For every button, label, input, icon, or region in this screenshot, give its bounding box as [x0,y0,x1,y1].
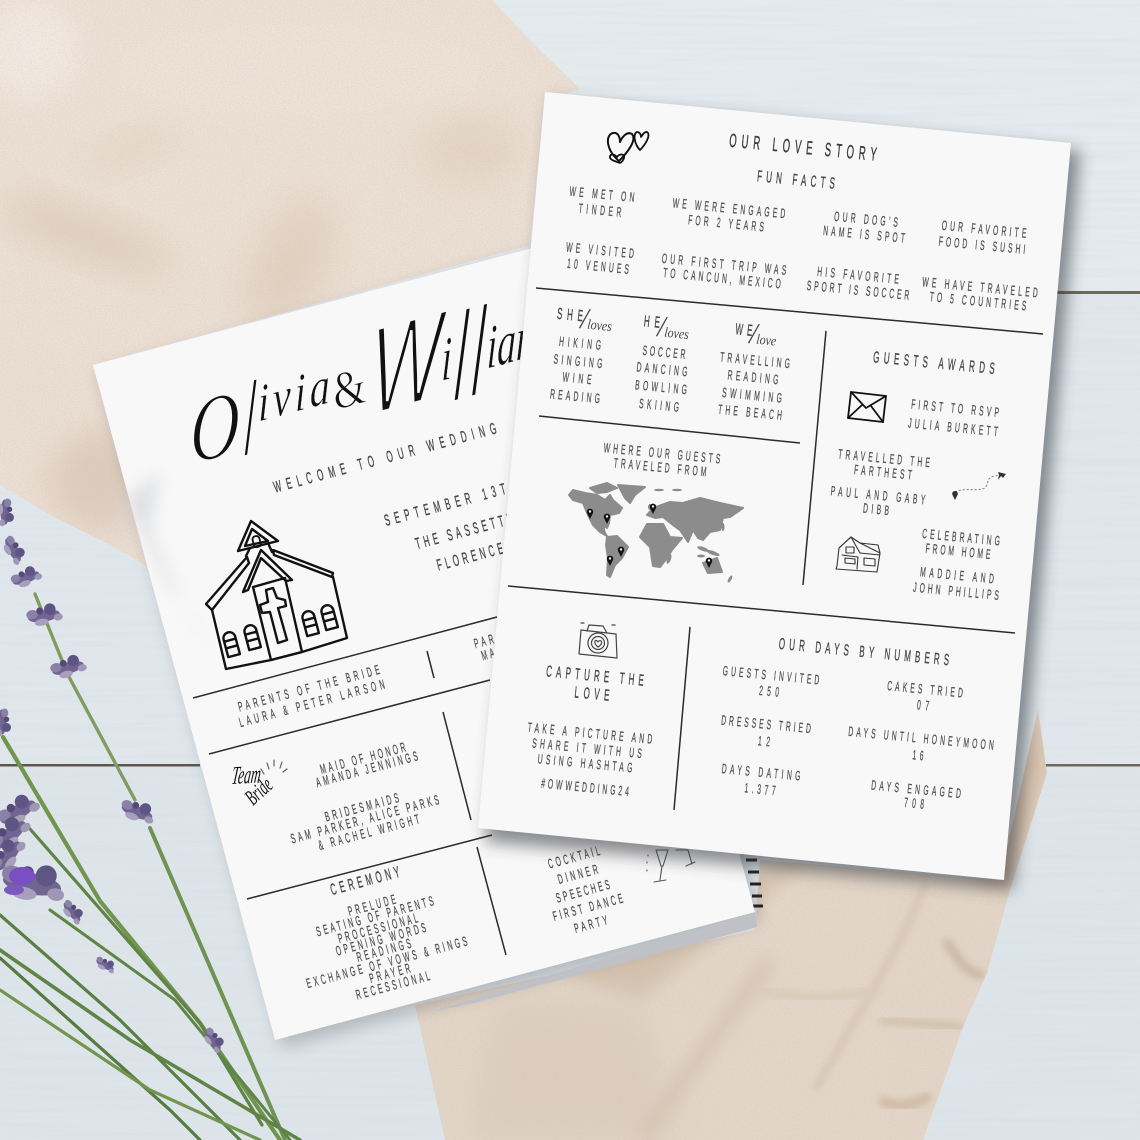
panel: wedding numbers: DAYS ENGAGED [870,778,962,802]
panel: capture the love: TAKE A PICTURE AND [527,720,653,748]
text: ceremony order: PROCESSIONAL [336,911,420,947]
text: first to RSVP: JULIA BURKETT [907,416,999,440]
text: ceremony order: CEREMONY [328,863,402,899]
text block: fun facts: WE VISITED [565,240,635,262]
panel: we love: TRAVELLING [719,350,791,372]
text: celebrating from home: CELEBRATING [921,527,1001,549]
panel: she loves: WINE [562,370,592,388]
icon: camera [579,623,617,658]
text: travelled the farthest: PAUL AND GABY [830,484,926,508]
panel: she loves [549,302,614,407]
panel: wedding numbers: GUESTS INVITED [722,664,820,688]
panel: capture the love: USING HASHTAG [537,752,633,776]
text: bridal party: AMANDA JENNINGS [314,749,420,791]
text block: fun facts: SPORT IS SOCCER [806,279,910,304]
text: reception order: FIRST DANCE [551,891,625,925]
panel: wedding numbers: 708 [903,795,925,813]
panel: she loves: HIKING [558,334,602,354]
text: reception order: COCKTAIL [546,844,602,872]
panel: we love: /love [746,317,778,353]
text: reception order [546,844,625,937]
icon: hearts [608,132,648,163]
icon: church [206,521,347,669]
title: Olivia & William: ll [451,277,490,432]
text: ceremony order [305,863,469,1003]
leaf shadow on card [125,470,215,650]
text: date and venue: SEPTEMBER 13T [382,480,508,530]
text block: fun facts: FOR 2 YEARS [687,213,765,235]
icon: Team Bride lettering [230,760,287,810]
panel: he loves: DANCING [636,360,688,380]
panel: he loves [634,310,691,415]
text: ceremony order: EXCHANGE OF VOWS & RINGS [305,934,469,992]
panel: wedding numbers [720,664,994,813]
panel: we love: SWIMMING [721,386,783,406]
text block: fun facts: OUR FIRST TRIP WAS [661,251,787,279]
text block: fun facts: WE MET ON [569,184,635,206]
dividers: lower back card [247,712,506,955]
panel: we love: WE [735,320,753,340]
panel: wedding numbers: DAYS DATING [721,762,801,784]
panel: capture the love: SHARE IT WITH US [532,736,642,762]
title: Olivia & William: l [239,356,261,483]
text: first to RSVP [907,397,1000,440]
text block: fun facts: OUR DOG'S [833,209,899,231]
text: celebrating from home: MADDIE AND [919,565,995,587]
text block: fun facts: 10 VENUES [566,256,630,278]
text: travelled the farthest: TRAVELLED THE [837,447,931,471]
text: date and venue [382,480,511,574]
panel: capture the love: #OWWEDDING24 [540,776,630,800]
text: bridal party: BRIDESMAIDS [323,791,401,825]
chart: world map with pins [569,483,743,583]
panel: he loves: BOWLING [634,378,688,398]
dividers: front card [508,288,1043,810]
heading: where guests traveled from: TRAVELED FROM [613,456,707,480]
booklet spiral and page edge [430,860,763,1012]
panel: wedding numbers: CAKES TRIED [886,679,964,701]
lavender sprigs [0,498,300,1140]
text: parents of the groom [472,632,497,664]
panel: we love: READING [727,368,779,388]
text block: fun facts: HIS FAVORITE [816,265,900,287]
icon: flight path [952,472,1006,500]
text: reception order: SPEECHES [554,878,612,906]
panel: wedding numbers: 1.377 [744,781,776,799]
linen cloth: bottom right [400,690,1060,1140]
text: first to RSVP: FIRST TO RSVP [910,397,1000,421]
text: celebrating from home: FROM HOME [925,541,991,563]
title: Olivia & William [189,258,545,496]
panel: wedding numbers: 250 [758,683,780,701]
text block: fun facts: WE WERE ENGAGED [672,196,786,222]
text block: fun facts: TO 5 COUNTRIES [929,290,1027,314]
heading: our days by numbers: OUR DAYS BY NUMBERS [778,635,950,669]
panel: capture the love: CAPTURE THE [545,662,645,690]
panel: wedding numbers: 16 [912,748,924,764]
text: celebrating from home [912,527,1001,604]
text: ceremony order: OPENING WORDS [334,921,428,959]
icon: champagne glasses [647,850,695,882]
heading: our love story: OUR LOVE STORY [728,130,878,166]
text: bridal party: & RACHEL WRIGHT [317,812,421,854]
text: parents of the bride: PARENTS OF THE BRIDE [237,663,381,715]
text: ceremony order: READINGS [355,936,413,966]
text: ceremony order: PRAYER [368,961,412,987]
panel: she loves: /loves [577,302,614,339]
title: Olivia & William: O [189,369,241,485]
text: parents of the groom: MA [480,646,497,664]
title: Olivia & William: iam [486,300,544,383]
text: travelled the farthest: DIBB [862,501,890,519]
shadow: front card [485,100,1080,890]
text block: fun facts: OUR FAVORITE [941,218,1027,242]
heading: where guests traveled from: WHERE OUR GUESTS [603,441,721,467]
icon: Team Bride lettering: Bride [240,772,277,810]
panel: we love [717,317,791,424]
panel: back programme card [93,237,755,1040]
text: ceremony order: RECESSIONAL [354,969,432,1003]
title: Olivia & William: & [324,357,373,421]
text: parents of the bride: LAURA & PETER LARSON [238,677,386,731]
text: bridal party: SAM PARKER, ALICE PARKS [289,793,441,847]
text: parents of the groom: PAR [472,632,496,652]
shadow: back programme [98,240,760,1048]
title: Olivia & William: ivia [257,355,334,434]
text block: fun facts: FOOD IS SUSHI [938,234,1026,258]
text: ceremony order: PRELUDE [346,892,398,920]
icon: house [836,537,880,572]
linen cloth: top left [0,0,600,600]
panel: he loves: SKIING [638,397,680,415]
text block: fun facts: TINDER [578,201,622,221]
panel: he loves: HE [643,312,661,332]
text: bridal party [289,740,441,854]
panel: he loves: SOCCER [642,343,686,363]
title: Olivia & William: i [441,324,453,395]
icon: Team Bride lettering: Team [230,761,263,790]
text block: fun facts: TO CANCUN, MEXICO [663,266,781,292]
text block: fun facts: NAME IS SPOT [822,224,906,247]
panel: wedding numbers: DAYS UNTIL HONEYMOON [848,724,994,754]
heading: our love story [728,130,878,193]
text: bridal party: MAID OF HONOR [319,740,408,778]
panel: she loves: SINGING [553,352,603,372]
panel: front card [478,92,1071,880]
dividers: parents row [193,617,497,754]
text: travelled the farthest: FARTHEST [853,463,913,483]
text: reception order: PARTY [573,913,609,937]
text: date and venue: THE SASSETT' [413,511,511,553]
text: celebrating from home: JOHN PHILLIPS [912,580,1000,604]
heading: guests awards: GUESTS AWARDS [872,348,996,378]
panel: wedding numbers: DRESSES TRIED [720,713,812,737]
panel: he loves: /loves [654,310,691,347]
text: date and venue: FLORENCE [435,540,505,574]
text: welcome heading: WELCOME TO OUR WEDDING [272,420,498,496]
heading: our love story: FUN FACTS [756,167,836,193]
text: travelled the farthest [830,447,931,519]
text block: fun facts [565,184,1039,314]
icon: envelope [848,392,886,422]
panel: we love: THE BEACH [717,402,783,424]
heading: where guests traveled from [603,441,721,480]
text: ceremony order: SEATING OF PARENTS [315,894,435,940]
panel: wedding numbers: 12 [757,734,771,750]
text: reception order: DINNER [556,862,600,888]
title: Olivia & William: W [369,283,449,443]
text block: fun facts: WE HAVE TRAVELED [922,275,1039,301]
panel: she loves: SHE [556,305,584,325]
panel: capture the love [527,662,653,800]
panel: wedding numbers: 07 [916,698,930,714]
panel: capture the love: LOVE [574,684,610,704]
panel: she loves: READING [549,387,601,407]
